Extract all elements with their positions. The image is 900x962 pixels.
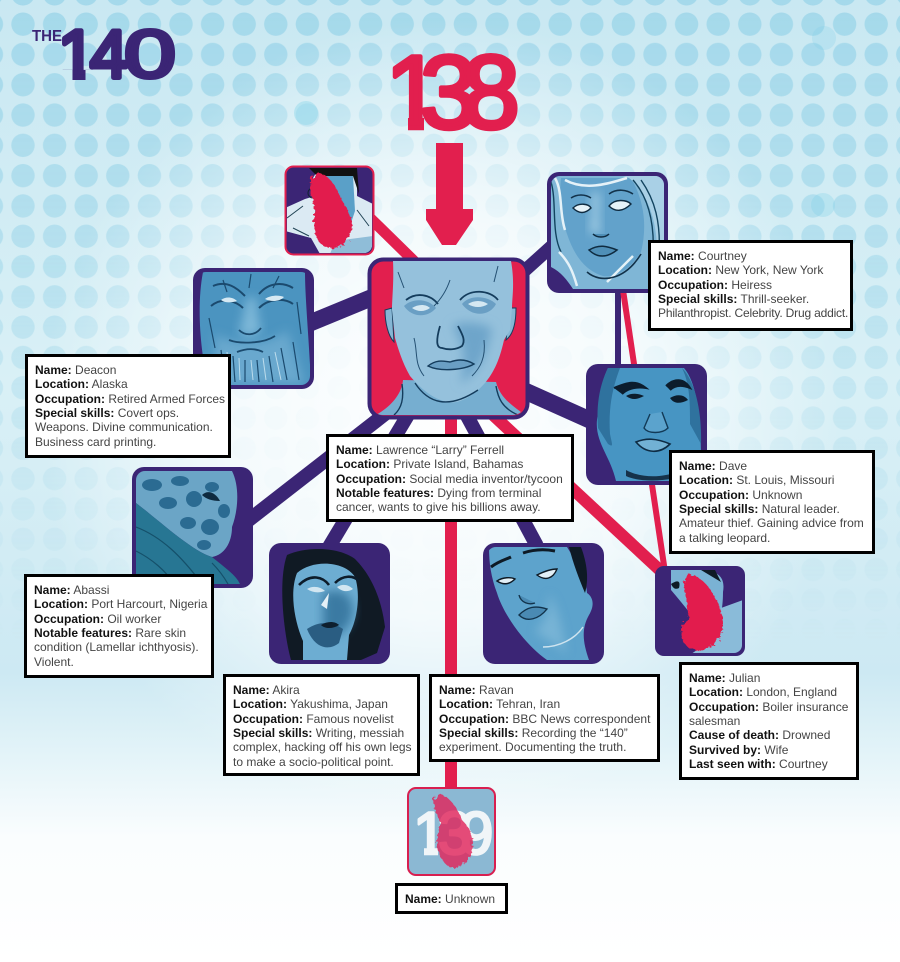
- info box: Akira: to make a socio-political point.: [233, 755, 394, 769]
- portrait: unknown 139 tile: [408, 788, 495, 875]
- info box: Lawrence Larry Ferrell: cancer, wants to give his billions away.: [336, 500, 541, 514]
- heading number: 138: [392, 53, 518, 132]
- info box: Dave: a talking leopard.: [679, 531, 770, 545]
- info box: Akira: Special skills: Writing, messiah: [233, 726, 404, 740]
- info box: Julian: Last seen with: Courtney: [689, 757, 828, 771]
- info box: Dave: Location: St. Louis, Missouri: [679, 473, 834, 487]
- info box: Courtney: [648, 240, 853, 331]
- info box: Lawrence Larry Ferrell: Occupation: Social media inventor/tycoon: [336, 472, 563, 486]
- info box: Abassi: Occupation: Oil worker: [34, 612, 161, 626]
- info box: Lawrence Larry Ferrell: Name: Lawrence “Larry” Ferrell: [336, 443, 504, 457]
- info box: Dave: Special skills: Natural leader.: [679, 502, 840, 516]
- heading number: 138: 3: [420, 35, 478, 151]
- portrait: unknown 139 tile: 1: [413, 800, 446, 867]
- info box: Akira: complex, hacking off his own legs: [233, 740, 412, 754]
- connector network: [245, 216, 665, 790]
- info box: Ravan: Location: Tehran, Iran: [439, 697, 560, 711]
- info box: Julian: Cause of death: Drowned: [689, 728, 830, 742]
- info box: Dave: [669, 450, 875, 554]
- info box: Lawrence Larry Ferrell: Notable features: Dying from terminal: [336, 486, 541, 500]
- info box: Deacon: Name: Deacon: [35, 363, 116, 377]
- logo: The 140: [32, 28, 176, 80]
- info box: Courtney: Location: New York, New York: [658, 263, 823, 277]
- logo: The 140: 0: [124, 16, 176, 92]
- info box: Deacon: Weapons. Divine communication.: [35, 420, 213, 434]
- info box: Julian: Location: London, England: [689, 685, 837, 699]
- info box: Dave: Name: Dave: [679, 459, 747, 473]
- info box: Abassi: Name: Abassi: [34, 583, 109, 597]
- info box: Ravan: Special skills: Recording the “140”: [439, 726, 628, 740]
- info box: Courtney: Occupation: Heiress: [658, 278, 772, 292]
- info box: Deacon: Business card printing.: [35, 435, 156, 449]
- info box: Unknown: Name: Unknown: [405, 892, 495, 906]
- info box: Julian: Survived by: Wife: [689, 743, 788, 757]
- portrait: Akira: [269, 543, 390, 664]
- portrait: Julian, deceased: [655, 566, 745, 656]
- portrait: Deacon: [193, 268, 314, 389]
- info box: Ravan: Name: Ravan: [439, 683, 514, 697]
- info box: Ravan: experiment. Documenting the truth.: [439, 740, 626, 754]
- info box: Abassi: Violent.: [34, 655, 74, 669]
- info box: Dave: Amateur thief. Gaining advice from: [679, 516, 864, 530]
- portrait: Abassi: [132, 467, 253, 588]
- portrait: dead man, upper left: [285, 166, 374, 254]
- info box: Deacon: Special skills: Covert ops.: [35, 406, 179, 420]
- info box: Julian: Name: Julian: [689, 671, 760, 685]
- info box: Deacon: [25, 354, 231, 458]
- logo: The 140: THE: [32, 28, 62, 45]
- info box: Courtney: Name: Courtney: [658, 249, 747, 263]
- logo: The 140: 4: [90, 16, 128, 92]
- info box: Abassi: condition (Lamellar ichthyosis).: [34, 640, 199, 654]
- info box: Ravan: Occupation: BBC News correspondent: [439, 712, 650, 726]
- heading number: 138: 1: [385, 35, 443, 151]
- info box: Julian: Occupation: Boiler insurance: [689, 700, 848, 714]
- info box: Akira: Location: Yakushima, Japan: [233, 697, 388, 711]
- info box: Courtney: Special skills: Thrill-seeker.: [658, 292, 809, 306]
- info box: Abassi: Notable features: Rare skin: [34, 626, 186, 640]
- info box: Deacon: Location: Alaska: [35, 377, 128, 391]
- portrait: Lawrence Larry Ferrell: [370, 260, 528, 418]
- info box: Julian: salesman: [689, 714, 740, 728]
- blood smear: [681, 575, 723, 650]
- portrait: unknown 139 tile: 9: [460, 800, 493, 867]
- portrait: Courtney: [547, 172, 668, 293]
- heading number: 138: 8: [462, 35, 520, 151]
- info box: Ravan: [429, 674, 660, 762]
- info box: Akira: Name: Akira: [233, 683, 300, 697]
- info box: Akira: Occupation: Famous novelist: [233, 712, 394, 726]
- info box: Unknown: [395, 883, 508, 914]
- blood smear: [434, 795, 473, 868]
- portrait: unknown 139 tile: 3: [438, 800, 471, 867]
- info box: Julian: [679, 662, 859, 780]
- info box: Abassi: Location: Port Harcourt, Nigeria: [34, 597, 207, 611]
- logo: The 140: 1: [58, 16, 96, 92]
- info box: Lawrence Larry Ferrell: Location: Private Island, Bahamas: [336, 457, 523, 471]
- blood smear: [310, 174, 352, 248]
- arrow: 138 pointing down to Larry: [426, 143, 473, 245]
- info box: Courtney: Philanthropist. Celebrity. Drug addict.: [658, 306, 848, 320]
- info box: Dave: Occupation: Unknown: [679, 488, 802, 502]
- portrait: Dave: [586, 364, 707, 485]
- info box: Deacon: Occupation: Retired Armed Forces: [35, 392, 225, 406]
- info box: Lawrence Larry Ferrell: [326, 434, 574, 522]
- info box: Abassi: [24, 574, 214, 678]
- info box: Akira: [223, 674, 420, 776]
- portrait: Ravan: [483, 543, 604, 664]
